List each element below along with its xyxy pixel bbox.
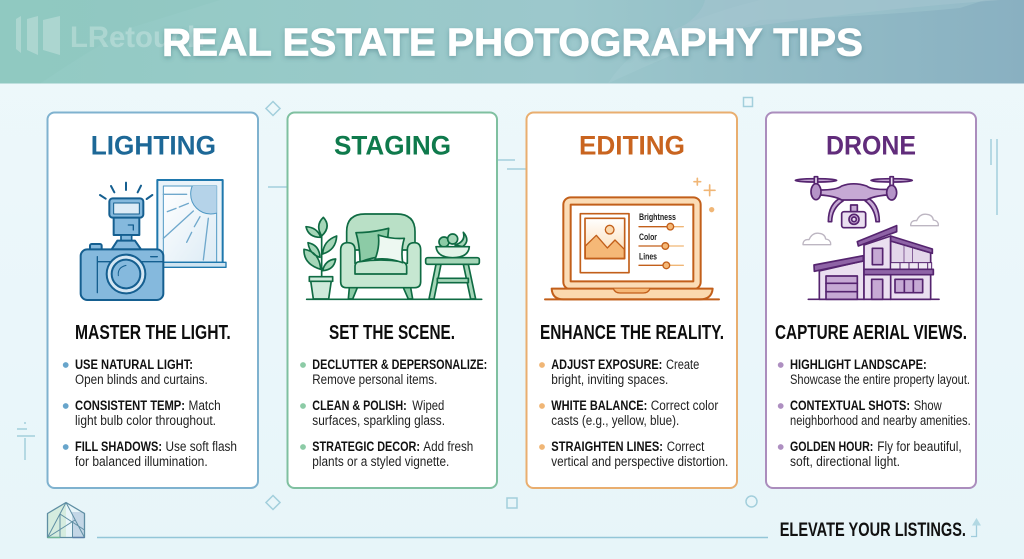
footer rule <box>97 536 768 538</box>
tip list: lighting <box>63 357 237 469</box>
tip list: editing: Correct <box>667 439 705 454</box>
tip list: staging: surfaces, sparkling glass. <box>312 413 445 428</box>
tip list: drone: Showcase the entire property layout. <box>790 372 970 387</box>
subheading: enhance the reality: ENHANCE THE REALITY. <box>540 322 724 344</box>
tip list: lighting: Use soft flash <box>166 439 237 454</box>
tip list: drone: Show <box>914 398 942 413</box>
heading: drone: DRONE <box>826 130 916 160</box>
tip list: editing: vertical and perspective distortion. <box>551 454 728 469</box>
tip list: editing: WHITE BALANCE: <box>551 398 647 413</box>
tip list: lighting: CONSISTENT TEMP: <box>75 398 185 413</box>
slider label: brightness: Brightness <box>639 212 676 223</box>
icon: footer house logo <box>48 502 84 538</box>
tip list: staging <box>300 357 487 469</box>
tip list: lighting: for balanced illumination. <box>75 454 208 469</box>
icon: drone above house <box>795 177 939 299</box>
tip list: lighting: FILL SHADOWS: <box>75 439 162 454</box>
tip list: drone: CONTEXTUAL SHOTS: <box>790 398 910 413</box>
heading: staging: STAGING <box>334 130 451 160</box>
tip list: editing <box>539 357 728 469</box>
header band <box>0 0 1024 84</box>
tip list: staging: plants or a styled vignette. <box>312 454 449 469</box>
tip list: editing: Correct color <box>651 398 719 413</box>
watermark logo <box>16 16 205 55</box>
tip list: editing: Create <box>666 357 699 372</box>
tip list: staging: Add fresh <box>423 439 473 454</box>
panel: editing <box>526 112 737 488</box>
subheading: capture aerial views: CAPTURE AERIAL VIEWS. <box>775 322 967 344</box>
panel: staging <box>288 112 497 488</box>
icon: up arrow <box>971 518 981 536</box>
tip list: editing: STRAIGHTEN LINES: <box>551 439 663 454</box>
tip list: lighting: Match <box>188 398 221 413</box>
tip list: staging: CLEAN & POLISH: <box>312 398 407 413</box>
panel: lighting <box>48 112 258 488</box>
tip list: staging: Remove personal items. <box>312 372 437 387</box>
tip list: staging: Wiped <box>412 398 444 413</box>
tip list: drone: Fly for beautiful, <box>877 439 962 454</box>
heading: lighting: LIGHTING <box>91 130 216 160</box>
icon: armchair, plant and side table <box>304 214 482 299</box>
tip list: drone: neighborhood and nearby amenities. <box>790 413 971 428</box>
title: REAL ESTATE PHOTOGRAPHY TIPS <box>162 22 863 64</box>
tip list: drone: soft, directional light. <box>790 454 900 469</box>
background decorations <box>17 98 997 510</box>
subheading: master the light: MASTER THE LIGHT. <box>75 322 231 344</box>
tip list: staging: STRATEGIC DECOR: <box>312 439 420 454</box>
tip list: editing: casts (e.g., yellow, blue). <box>551 413 679 428</box>
panel: drone <box>766 112 976 488</box>
tip list: drone: HIGHLIGHT LANDSCAPE: <box>790 357 927 372</box>
subheading: set the scene: SET THE SCENE. <box>329 322 455 344</box>
icon: camera with flash and sunny window <box>81 174 231 300</box>
tip list: lighting: light bulb color throughout. <box>75 413 216 428</box>
slider label: lines: Lines <box>639 252 657 263</box>
tip list: drone <box>778 357 971 469</box>
watermark logo: LRetouch <box>70 21 205 54</box>
heading: editing: EDITING <box>579 130 685 160</box>
tip list: lighting: USE NATURAL LIGHT: <box>75 357 193 372</box>
tip list: editing: bright, inviting spaces. <box>551 372 668 387</box>
footer tagline: ELEVATE YOUR LISTINGS. <box>780 520 966 541</box>
slider label: color: Color <box>639 232 657 243</box>
icon: laptop with photo editor <box>545 178 719 299</box>
tip list: lighting: Open blinds and curtains. <box>75 372 208 387</box>
tip list: staging: DECLUTTER & DEPERSONALIZE: <box>312 357 487 372</box>
tip list: drone: GOLDEN HOUR: <box>790 439 873 454</box>
tip list: editing: ADJUST EXPOSURE: <box>551 357 662 372</box>
